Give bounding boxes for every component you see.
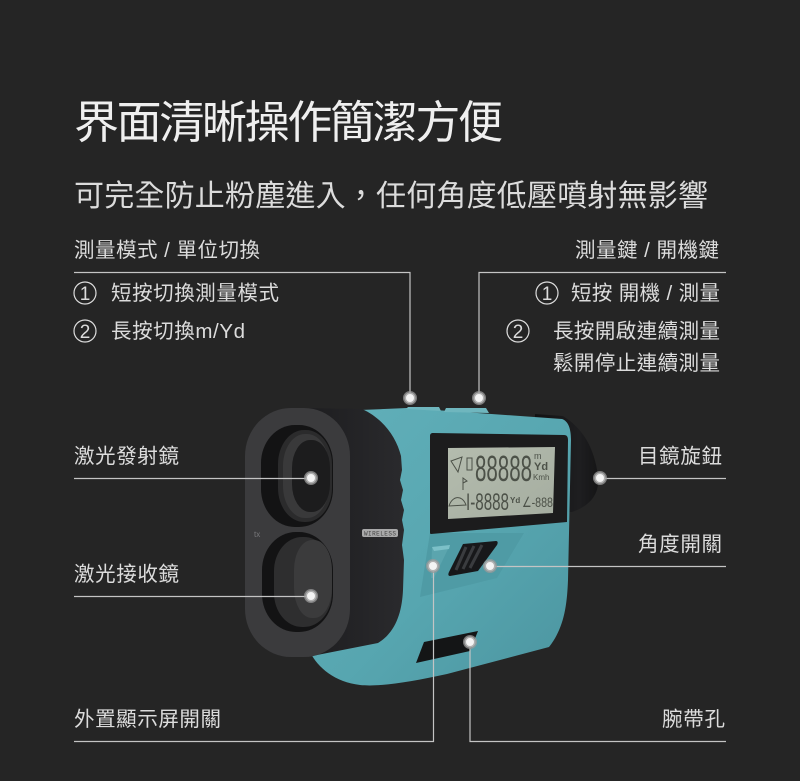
lower lens [262, 532, 333, 632]
LCD display: I-8888 [466, 489, 509, 516]
callout: eyepiece knob: 目鏡旋鈕 [638, 445, 722, 468]
LCD display [448, 447, 555, 519]
front rubber face [245, 408, 350, 657]
LCD display: 88888 [475, 448, 532, 489]
callout: measure and power key: 測量鍵 / 開機鍵 [575, 239, 719, 262]
angle switch [448, 541, 498, 576]
badge: WIRELESS [364, 530, 396, 538]
face marking tx: tx [254, 530, 260, 539]
eyepiece [535, 414, 598, 512]
callout: measurement mode and unit switch: 長按切換m/Yd [111, 320, 245, 343]
callout: measure and power key: 鬆開停止連續測量 [553, 352, 720, 375]
title: 界面清晰操作簡潔方便 [74, 97, 503, 148]
LCD display: Yd [510, 496, 520, 505]
callout: measurement mode and unit switch [74, 239, 410, 398]
marker dots [306, 392, 606, 648]
callout: measure and power key: 短按 開機 / 測量 [571, 282, 720, 305]
callout: measure and power key: 2 [513, 322, 523, 343]
callout: measure and power key: 1 [542, 284, 552, 305]
top buttons [406, 407, 489, 413]
callout: measure and power key [479, 239, 726, 398]
callout: measurement mode and unit switch: 2 [80, 322, 90, 343]
subtitle: 可完全防止粉塵進入，任何角度低壓噴射無影響 [74, 180, 708, 213]
LCD display: ∠-888 [522, 494, 553, 510]
wrist strap hole [416, 631, 478, 663]
LCD display: m [534, 451, 542, 461]
callout: measurement mode and unit switch: 短按切換測量模式 [111, 282, 279, 305]
callout: angle switch: 角度開關 [638, 533, 722, 556]
callout: laser receiving lens: 激光接收鏡 [74, 563, 179, 586]
callout: measure and power key: 長按開啟連續測量 [553, 320, 720, 343]
lower control panel [420, 533, 524, 597]
callout: external display switch: 外置顯示屏開關 [74, 708, 221, 731]
callout: laser emitting lens: 激光發射鏡 [74, 445, 179, 468]
callout: measurement mode and unit switch: 測量模式 / 單位切換 [74, 239, 260, 262]
dark barrel [290, 408, 404, 657]
callout: wrist strap hole [470, 642, 726, 742]
teal body [310, 408, 571, 685]
callout: measurement mode and unit switch: 1 [80, 284, 90, 305]
callout: wrist strap hole: 腕帶孔 [662, 708, 725, 731]
callout: eyepiece knob [600, 445, 726, 478]
screen frame [430, 433, 568, 534]
callout: external display switch [74, 566, 434, 742]
LCD display: Kmh [533, 473, 549, 482]
upper lens [261, 425, 333, 527]
display switch button [431, 545, 450, 578]
device: laser rangefinder [245, 407, 598, 685]
LCD display: Yd [534, 461, 548, 473]
